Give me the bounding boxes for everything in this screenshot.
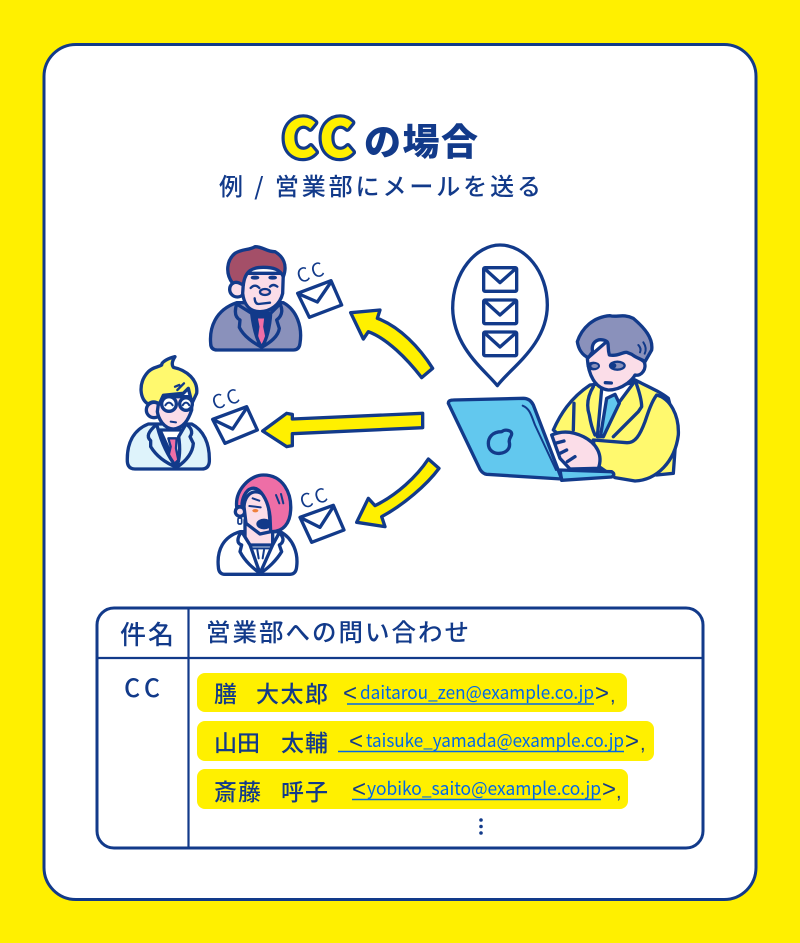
envelope with CC label middle — [208, 380, 257, 443]
laptop — [448, 398, 614, 480]
recipient row 3: , — [616, 781, 622, 803]
title CC: C — [319, 98, 354, 174]
recipient row 1: daitarou_zen@example.co.jp — [360, 679, 594, 705]
man at laptop — [448, 316, 678, 481]
email form table — [97, 608, 703, 848]
person: red-haired man — [210, 247, 301, 350]
recipient row 2: < — [349, 728, 363, 755]
title CC: C — [282, 98, 317, 174]
recipient row 1 — [197, 673, 627, 712]
person: pink-haired woman — [218, 475, 297, 574]
recipient row 2: > — [625, 728, 639, 755]
mail icons in bubble — [484, 268, 517, 356]
subtitle: 例 / 営業部にメールを送る — [219, 167, 541, 202]
recipient row 2: taisuke_yamada@example.co.jp — [366, 727, 624, 753]
arrow to bottom person — [357, 459, 439, 527]
envelope with CC label top — [293, 253, 342, 317]
arrow to middle person — [263, 413, 423, 447]
table frame — [97, 608, 703, 848]
title CC — [282, 98, 354, 174]
envelope with CC label bottom: CC — [296, 479, 334, 515]
recipient row 2: 太輔 — [281, 724, 328, 758]
envelope with CC label top: CC — [293, 253, 330, 289]
recipient row 3: 呼子 — [281, 773, 328, 807]
recipient row 2 — [197, 721, 654, 761]
title rest: の場合 — [364, 112, 478, 166]
envelope with CC label bottom — [296, 479, 344, 542]
more recipients ellipsis — [479, 818, 483, 835]
recipient row 3 — [197, 769, 628, 809]
recipient row 1: , — [610, 685, 616, 707]
recipient row 3: 斎藤 — [214, 773, 261, 807]
table dividers — [97, 608, 703, 848]
title — [282, 98, 478, 174]
subject value: 営業部への問い合わせ — [206, 614, 469, 649]
recipient row 2: 山田 — [214, 724, 260, 758]
recipient row 2: , — [640, 733, 646, 755]
person: blonde man with glasses — [127, 357, 209, 469]
people illustrations on the left — [127, 247, 344, 574]
arrow to top person — [351, 310, 433, 378]
recipient row 1: < — [343, 680, 357, 707]
recipient row 3: < — [352, 776, 366, 803]
CC label: CC — [124, 669, 160, 705]
recipient row 1: > — [595, 680, 609, 707]
envelope with CC label middle: CC — [208, 380, 246, 416]
subject label: 件名 — [120, 615, 174, 652]
recipient row 3: > — [602, 776, 616, 803]
speech bubble with emails — [453, 245, 547, 386]
recipient row 1: 膳 — [214, 675, 237, 709]
recipient row 1: 大太郎 — [256, 675, 328, 709]
arrows and sender illustration — [263, 245, 678, 527]
recipient row 3: yobiko_saito@example.co.jp — [367, 775, 601, 801]
